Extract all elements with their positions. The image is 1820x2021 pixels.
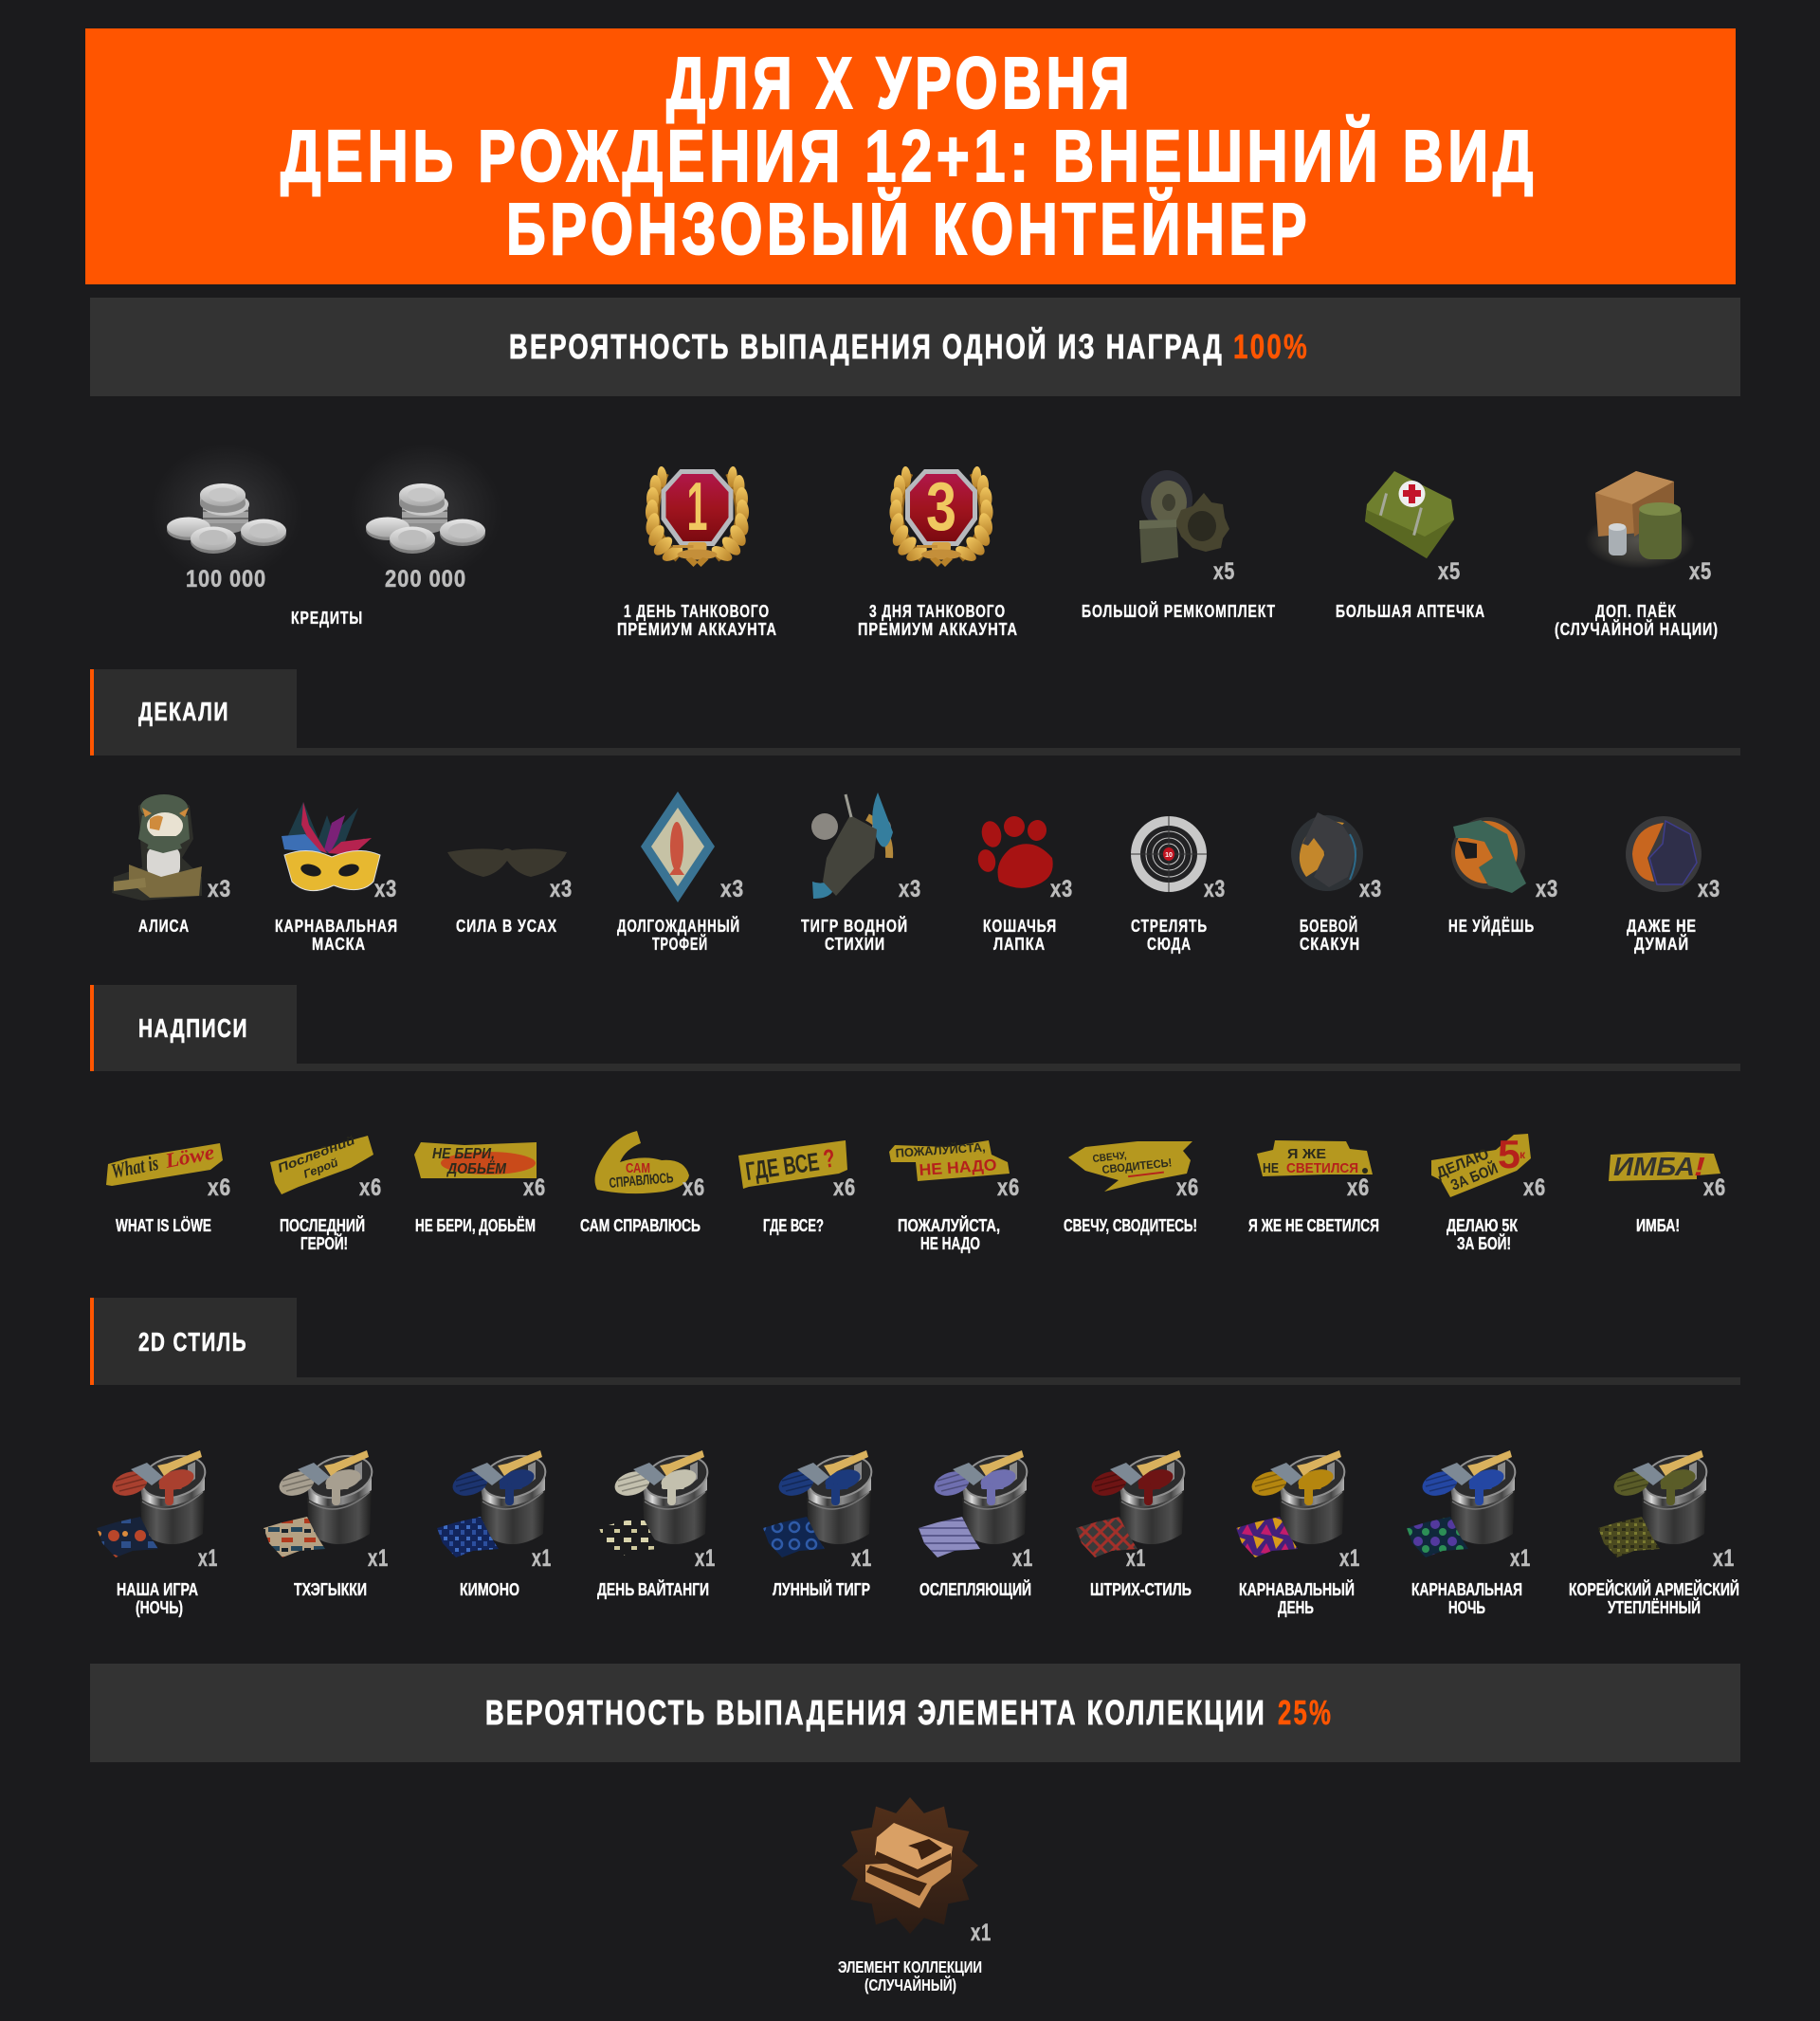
quantity x3: x3 <box>720 876 744 902</box>
icon: brush 5k: ЗА БОЙ <box>1447 1159 1501 1194</box>
label: large repair kit: БОЛЬШОЙ РЕМКОМПЛЕКТ <box>1082 601 1276 621</box>
icon: paint bucket bright blue <box>1407 1449 1520 1557</box>
icon: brush please don't <box>889 1139 1010 1181</box>
inscription: What is Löwe <box>106 1139 231 1235</box>
inscription: where is everyone <box>738 1140 856 1235</box>
icon: brush last hero: Герой <box>301 1156 340 1181</box>
style: lunar tiger <box>763 1449 876 1599</box>
icon: brush last hero: Последний <box>276 1133 356 1175</box>
label: 3 days premium: 3 ДНЯ ТАНКОВОГО <box>869 601 1006 621</box>
label: ПОЖАЛУЙСТА, <box>898 1215 1000 1235</box>
style: Waitangi day <box>597 1449 716 1599</box>
decal: Alisa <box>112 794 231 936</box>
label: КАРНАВАЛЬНЫЙ <box>1239 1579 1355 1599</box>
quantity x3: x3 <box>1359 876 1382 902</box>
label: extra rations: ДОП. ПАЁК <box>1595 601 1677 621</box>
quantity x1: x1 <box>1012 1545 1033 1572</box>
label: ОСЛЕПЛЯЮЩИЙ <box>919 1579 1031 1599</box>
quantity x5: x5 <box>1438 558 1461 585</box>
icon: t-rex <box>1451 817 1526 893</box>
panel: probability of collection item 25%: 25% <box>1278 1693 1333 1732</box>
quantity x1: x1 <box>1510 1545 1531 1572</box>
icon: brush please don't: ПОЖАЛУЙСТА, <box>895 1139 986 1160</box>
icon: brush don't take: НЕ БЕРИ, <box>432 1146 495 1162</box>
quantity x1: x1 <box>532 1545 552 1572</box>
icon: cat in box <box>112 794 202 901</box>
quantity x3: x3 <box>1204 876 1226 902</box>
quantity x1: x1 <box>695 1545 716 1572</box>
icon: brush What is Löwe: Löwe <box>162 1139 216 1173</box>
quantity x5: x5 <box>1689 558 1712 585</box>
decal: you won't get away <box>1448 817 1558 936</box>
icon: horse <box>1291 812 1363 891</box>
style: kimono <box>437 1449 552 1599</box>
icon: paint bucket red <box>97 1449 209 1557</box>
icon: red paw <box>975 816 1053 888</box>
icon: paint bucket amber <box>1236 1449 1349 1557</box>
label: ДЕЛАЮ 5К <box>1447 1215 1519 1235</box>
quantity x1: x1 <box>198 1545 218 1572</box>
panel: probability of reward 100%: 100% <box>1233 327 1309 366</box>
label: Я ЖЕ НЕ СВЕТИЛСЯ <box>1248 1215 1379 1235</box>
icon: medal 3: 3 <box>926 469 956 545</box>
label: ДАЖЕ НЕ <box>1627 916 1697 936</box>
quantity x5: x5 <box>1213 558 1235 585</box>
inscription: please don't: НЕ НАДО <box>920 1233 980 1253</box>
icon: repair kit <box>1139 470 1229 563</box>
icon: brush candle: СВЕЧУ, <box>1092 1150 1127 1165</box>
section header: inscriptions <box>90 985 1740 1071</box>
icon: bronze star with books <box>842 1797 978 1934</box>
icon: brush not spotted: Я ЖЕ <box>1287 1146 1326 1162</box>
section header: decals <box>90 669 1740 756</box>
decal: carnival mask <box>275 802 398 954</box>
label: АЛИСА <box>138 916 190 936</box>
label: credits: КРЕДИТЫ <box>291 608 363 628</box>
decal: cat's paw: ЛАПКА <box>993 934 1046 954</box>
panel: probability of reward 100%: ВЕРОЯТНОСТЬ ВЫПАДЕНИЯ ОДНОЙ ИЗ НАГРАД <box>509 326 1224 366</box>
icon: brush not spotted <box>1257 1140 1373 1176</box>
label: НЕ УЙДЁШЬ <box>1448 916 1535 936</box>
icon: rations <box>1585 471 1695 569</box>
label: ШТРИХ-СТИЛЬ <box>1090 1579 1192 1599</box>
inscription: last hero: ГЕРОЙ! <box>300 1233 348 1253</box>
icon: target: 10 <box>1165 852 1173 859</box>
quantity x1: x1 <box>1713 1545 1735 1572</box>
style: Korean army winterized <box>1569 1449 1739 1617</box>
style: dazzling <box>919 1449 1033 1599</box>
icon: brush 5k <box>1431 1132 1531 1197</box>
icon: paint bucket blue <box>437 1449 550 1557</box>
icon: brush where is everyone: ? <box>822 1144 837 1174</box>
style: our game (night): (НОЧЬ) <box>136 1597 183 1617</box>
label: КАРНАВАЛЬНАЯ <box>1411 1579 1522 1599</box>
quantity x6: x6 <box>997 1174 1020 1201</box>
quantity x3: x3 <box>1536 876 1558 902</box>
icon: credits 200 000 <box>350 444 501 580</box>
inscription: candle, surrender <box>1064 1141 1199 1235</box>
icon: brush What is Löwe: What is <box>109 1151 160 1183</box>
style: hatch style <box>1076 1449 1192 1599</box>
quantity x3: x3 <box>1698 876 1720 902</box>
icon: brush not spotted: СВЕТИЛСЯ <box>1286 1160 1358 1176</box>
style: carnival day <box>1236 1449 1360 1617</box>
decal: don't even think: ДУМАЙ <box>1634 934 1689 954</box>
decal: power in a mustache <box>447 848 573 936</box>
icon: brush 5k: 5 <box>1498 1132 1520 1176</box>
icon: brush bicep <box>595 1131 689 1193</box>
label: ИМБА! <box>1636 1215 1680 1235</box>
reward: large first aid kit <box>1336 471 1485 621</box>
icon: brush don't take <box>414 1142 537 1178</box>
rewards: credits <box>151 444 501 628</box>
quantity x3: x3 <box>550 876 573 902</box>
icon: brush not spotted: НЕ <box>1263 1160 1279 1176</box>
icon: medal 1 <box>644 466 751 567</box>
decal: shoot here: СЮДА <box>1147 934 1192 954</box>
label: СИЛА В УСАХ <box>456 916 557 936</box>
label: САМ СПРАВЛЮСЬ <box>580 1215 701 1235</box>
section header: inscriptions: НАДПИСИ <box>138 1013 248 1043</box>
label: НЕ БЕРИ, ДОБЬЁМ <box>415 1215 536 1235</box>
icon: paint bucket olive <box>1598 1449 1711 1557</box>
icon: first aid kit <box>1365 471 1454 558</box>
icon: brush bicep: САМ <box>626 1160 650 1176</box>
icon: mustache <box>447 848 567 877</box>
icon: brush candle: СВОДИТЕСЬ! <box>1101 1156 1173 1176</box>
icon: paint bucket dark red <box>1076 1449 1189 1557</box>
label: КИМОНО <box>460 1579 519 1599</box>
panel: probability of reward 100% <box>90 298 1740 396</box>
inscription: doing 5k per battle: ЗА БОЙ! <box>1457 1233 1511 1253</box>
section header: decals: ДЕКАЛИ <box>138 697 229 726</box>
quantity x6: x6 <box>682 1174 705 1201</box>
decal: water tiger <box>801 792 921 954</box>
icon: brush please don't: НЕ НАДО <box>919 1156 997 1179</box>
quantity x3: x3 <box>374 876 397 902</box>
quantity x1: x1 <box>851 1545 872 1572</box>
quantity x6: x6 <box>1523 1174 1546 1201</box>
reward: 3 days premium <box>858 466 1018 639</box>
decal: carnival mask: МАСКА <box>312 934 366 954</box>
icon: brush imba: ИМБА <box>1613 1152 1695 1181</box>
label: WHAT IS LÖWE <box>116 1215 211 1235</box>
label: ДОЛГОЖДАННЫЙ <box>617 916 740 936</box>
icon: brush where is everyone: ГДЕ ВСЕ <box>744 1147 821 1186</box>
icon: paint bucket cream <box>599 1449 712 1557</box>
icon: brush 5k: к <box>1520 1148 1526 1161</box>
inscription: I wasn't spotted <box>1248 1140 1379 1235</box>
quantity x3: x3 <box>899 876 921 902</box>
label: КАРНАВАЛЬНАЯ <box>275 916 398 936</box>
decal: water tiger: СТИХИИ <box>825 934 885 954</box>
quantity x1: x1 <box>368 1545 389 1572</box>
panel: probability of collection item 25%: ВЕРОЯТНОСТЬ ВЫПАДЕНИЯ ЭЛЕМЕНТА КОЛЛЕКЦИИ <box>485 1693 1266 1732</box>
quantity x1: x1 <box>1126 1545 1146 1572</box>
quantity x6: x6 <box>833 1174 856 1201</box>
inscription: imba <box>1609 1152 1726 1235</box>
label: БОЕВОЙ <box>1300 916 1358 936</box>
amount 200 000: 200 000 <box>385 566 466 592</box>
icon: paint bucket beige <box>264 1449 376 1557</box>
reward: 3 days premium: ПРЕМИУМ АККАУНТА <box>858 619 1018 639</box>
icon: brush imba: ! <box>1694 1152 1705 1181</box>
reward: extra rations <box>1555 471 1719 639</box>
icon: paint bucket navy <box>763 1449 876 1557</box>
label: КОРЕЙСКИЙ АРМЕЙСКИЙ <box>1569 1579 1739 1599</box>
icon: tiger <box>811 792 893 899</box>
decal: long-awaited trophy: ТРОФЕЙ <box>652 934 708 954</box>
icon: target <box>1131 816 1207 892</box>
label: НАША ИГРА <box>117 1579 198 1599</box>
collection element: (СЛУЧАЙНЫЙ) <box>864 1975 956 1994</box>
icon: paint bucket lilac <box>919 1449 1031 1557</box>
decal: shoot here <box>1131 816 1226 954</box>
quantity x6: x6 <box>523 1174 546 1201</box>
title line 1: ДЛЯ X УРОВНЯ <box>666 43 1134 124</box>
decal: cat's paw <box>975 816 1073 954</box>
icon: medal 1: 1 <box>686 469 707 545</box>
quantity x1: x1 <box>971 1920 992 1946</box>
decal: war horse <box>1291 812 1382 954</box>
icon: brush candle <box>1068 1141 1192 1192</box>
quantity x6: x6 <box>1703 1174 1726 1201</box>
icon: brush 5k: ДЕЛАЮ <box>1434 1146 1491 1182</box>
title line 3: БРОНЗОВЫЙ КОНТЕЙНЕР <box>506 187 1311 270</box>
reward: large repair kit <box>1082 470 1276 621</box>
icon: medal 3 <box>888 466 994 567</box>
label: ЭЛЕМЕНТ КОЛЛЕКЦИИ <box>838 1957 982 1976</box>
label: ТХЭГЫККИ <box>294 1579 367 1599</box>
label: СВЕЧУ, СВОДИТЕСЬ! <box>1064 1215 1197 1235</box>
quantity x3: x3 <box>1050 876 1073 902</box>
quantity x6: x6 <box>1176 1174 1199 1201</box>
label: 1 day premium: 1 ДЕНЬ ТАНКОВОГО <box>624 601 770 621</box>
label: КОШАЧЬЯ <box>983 916 1057 936</box>
collection element <box>838 1797 992 1994</box>
icon: diamond with fish <box>641 792 715 902</box>
reward: 1 day premium <box>617 466 777 639</box>
section header: 2D style: 2D СТИЛЬ <box>138 1327 247 1356</box>
icon: brush bicep: СПРАВЛЮСЬ <box>609 1170 674 1192</box>
icon: brush last hero <box>270 1133 373 1194</box>
label: large first aid kit: БОЛЬШАЯ АПТЕЧКА <box>1336 601 1485 621</box>
style: carnival day: ДЕНЬ <box>1278 1597 1314 1617</box>
icon: mask <box>282 802 380 891</box>
icon: brush don't take: ДОБЬЁМ <box>446 1160 507 1177</box>
label: ДЕНЬ ВАЙТАНГИ <box>597 1579 709 1599</box>
style: taegeuk <box>264 1449 389 1599</box>
icon: brush imba <box>1609 1152 1720 1181</box>
quantity x6: x6 <box>208 1174 231 1201</box>
inscription: don't take, finish <box>414 1142 546 1235</box>
section header: 2D style <box>90 1298 1740 1385</box>
quantity x1: x1 <box>1339 1545 1360 1572</box>
decal: long-awaited trophy <box>617 792 744 954</box>
label: СТРЕЛЯТЬ <box>1131 916 1208 936</box>
style: carnival night <box>1407 1449 1531 1617</box>
icon: brush What is Löwe <box>106 1139 223 1186</box>
panel: probability of collection item 25% <box>90 1664 1740 1762</box>
label: ТИГР ВОДНОЙ <box>801 916 908 936</box>
inscription: please don't <box>889 1139 1020 1253</box>
style: carnival night: НОЧЬ <box>1448 1597 1485 1617</box>
inscription: last hero <box>270 1133 382 1253</box>
amount 100 000: 100 000 <box>186 566 266 592</box>
decal: don't even think <box>1626 816 1720 954</box>
quantity x6: x6 <box>1347 1174 1370 1201</box>
icon: credits 100 000 <box>151 444 302 580</box>
quantity x3: x3 <box>208 876 231 902</box>
label: ГДЕ ВСЕ? <box>763 1215 824 1235</box>
style: Korean army winterized: УТЕПЛЁННЫЙ <box>1608 1597 1701 1617</box>
label: ПОСЛЕДНИЙ <box>280 1215 365 1235</box>
title banner <box>85 28 1736 284</box>
style: our game (night) <box>97 1449 218 1617</box>
inscription: I can handle it <box>580 1131 705 1235</box>
decal: war horse: СКАКУН <box>1300 934 1360 954</box>
inscription: doing 5k per battle <box>1431 1132 1546 1253</box>
reward: extra rations: (СЛУЧАЙНОЙ НАЦИИ) <box>1555 619 1719 639</box>
icon: rhino <box>1626 816 1702 892</box>
reward: 1 day premium: ПРЕМИУМ АККАУНТА <box>617 619 777 639</box>
quantity x6: x6 <box>359 1174 382 1201</box>
label: ЛУННЫЙ ТИГР <box>773 1579 870 1599</box>
